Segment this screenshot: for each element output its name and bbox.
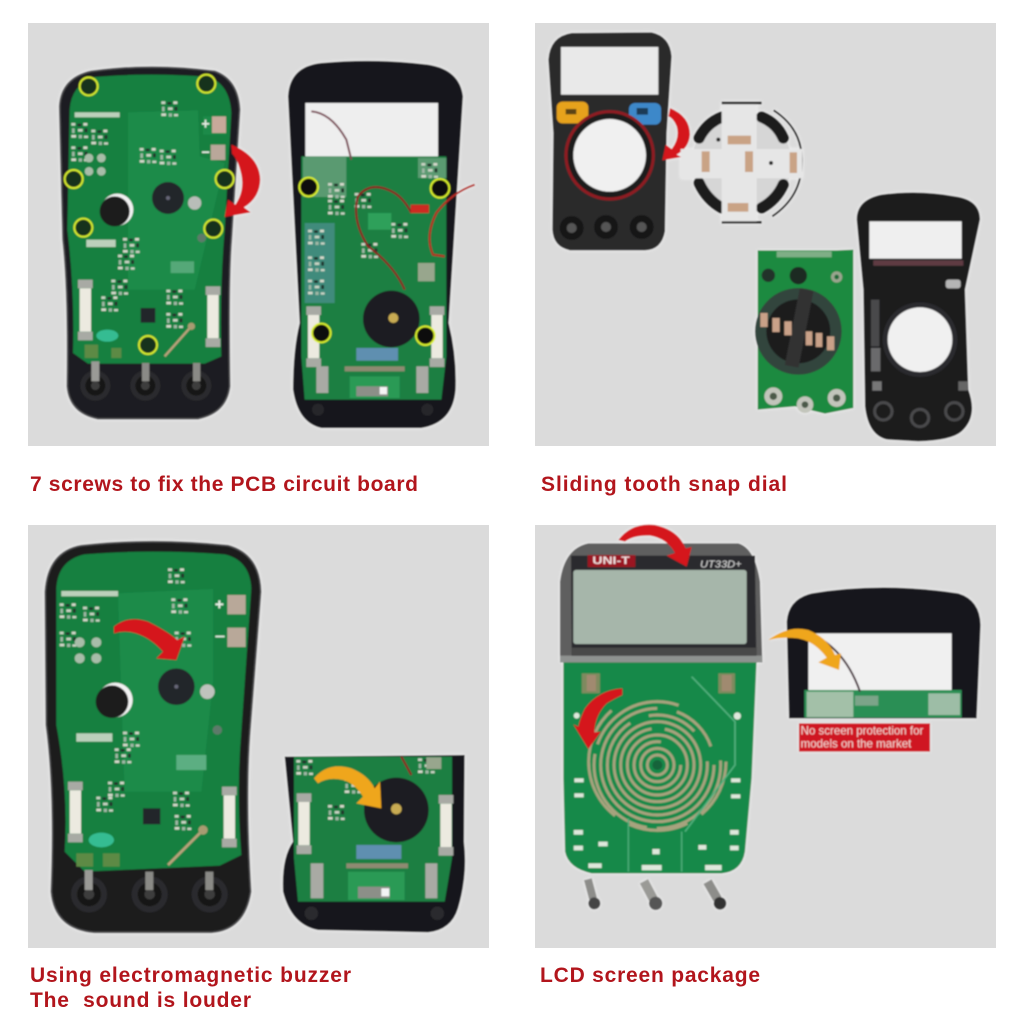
circuit board with dial [755,250,853,414]
buzzer [152,182,184,214]
panel background [535,23,996,446]
input jacks [80,361,211,401]
terminal screws [582,878,729,912]
screw markers [65,75,234,354]
panel background [28,525,489,948]
buzzer [363,291,420,347]
panel background [535,525,996,948]
panel: LCD package [535,525,996,948]
arrow: red curved [225,145,260,217]
battery hole [101,194,133,226]
LCD module [560,543,762,662]
photos: buzzer on circuit board [45,542,465,932]
panel: PCB screws [28,23,489,446]
callout: no screen protection [799,723,930,752]
battery hole [98,683,133,717]
caption: dial: Sliding tooth snap dial [541,473,787,496]
panel: sliding dial [535,23,996,446]
caption: buzzer line 1: Using electromagnetic buzzer [30,964,351,987]
brand label [588,555,635,567]
model label: UT33D+ [700,559,742,570]
callout: no screen protection: No screen protection for [801,724,923,737]
photos: opened multimeter halves [60,61,475,428]
rear housing close-up [283,755,465,932]
caption: buzzer line 2: The sound is louder [30,989,251,1012]
brand label: UNI-T [592,555,630,567]
rear housing with no screen protection [787,587,981,718]
circuit board with rotary track [563,660,757,912]
input jacks [71,870,228,912]
arrow: red on circuit board [573,688,622,749]
callout: no screen protection: models on the market [801,737,912,750]
meter back half [45,542,261,932]
panel: buzzer [28,525,489,948]
concentric contact tracks [589,693,726,830]
caption: LCD: LCD screen package [540,964,760,987]
buzzer [364,778,429,842]
meter front half with circuit board [288,61,475,428]
arrow: red curved [662,108,690,160]
photos: dial assembly [548,32,980,441]
panel background [28,23,489,446]
photos: LCD module and housing [560,525,981,912]
front housing with buttons [548,32,672,250]
caption: screws: 7 screws to fix the PCB circuit board [30,473,418,496]
wires [311,111,475,290]
screw markers [299,178,449,345]
arrow: red curved [114,619,185,660]
arrow: red over LCD [618,525,692,567]
meter back half with circuit board [60,67,240,419]
rear housing [857,193,980,441]
arrow: yellow curved [768,629,841,670]
dial contact plate [681,103,802,222]
buzzer [158,668,195,705]
arrow: yellow curved [314,766,381,808]
